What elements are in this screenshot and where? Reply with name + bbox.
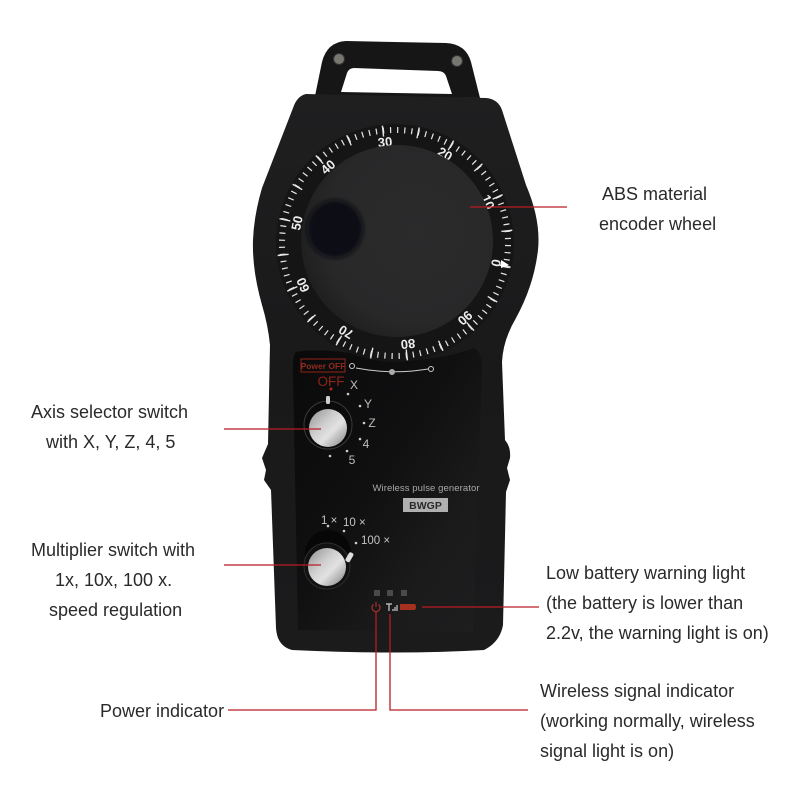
knob base [304,401,352,449]
power slider mark [389,369,395,375]
lower face panel [293,348,482,632]
dial numbers: 30 [377,134,393,150]
dial numbers: 0 [488,258,504,268]
axis letters: X [350,378,358,392]
product description: Wireless pulse generator [372,483,480,494]
dial numbers: 20 [435,144,455,164]
multiplier labels: 1 × [321,515,337,527]
power off box [301,359,345,372]
knob pointer [326,396,330,404]
knob skirt [304,543,350,589]
multiplier scale [321,515,390,547]
handle screw right [452,56,462,66]
indicator lights [372,590,416,612]
axis letters: Z [368,416,376,430]
label: multiplier switch [31,540,195,620]
knob pointer [345,552,354,563]
dial numbers: 50 [288,214,306,232]
multiplier labels [321,515,390,547]
label: axis selector: with X, Y, Z, 4, 5 [45,432,175,452]
label: low battery: Low battery warning light [546,563,745,583]
leader lines [224,207,567,710]
dial numbers: 90 [455,308,475,328]
off dot [330,388,332,390]
encoder dial scale [261,109,529,377]
multiplier labels: 10 × [343,517,366,529]
label: power indicator: Power indicator [100,701,224,721]
multiplier dots [327,525,357,544]
dial face [276,124,514,362]
power icon [372,602,380,612]
carrying handle [315,41,480,98]
multiplier labels: 100 × [361,535,390,547]
label: multiplier switch: 1x, 10x, 100 x. [55,570,172,590]
dial numbers: 80 [400,336,416,352]
dial numbers: 10 [478,192,498,212]
label: multiplier switch: speed regulation [49,600,182,620]
led windows [374,590,407,596]
axis letters: 4 [363,437,370,451]
label: wireless signal: signal light is on) [540,741,674,761]
dial numbers [288,134,504,352]
axis letters: Y [364,397,372,411]
knob silver cap [308,548,346,586]
product name [372,483,480,512]
knob silver cap [309,409,347,447]
signal icon [386,604,397,611]
handheld pulse generator device [253,41,538,652]
power off text: Power OFF [301,361,345,371]
dial numbers: 60 [293,275,313,295]
power off label and slider [301,359,434,375]
power slider scale [356,368,428,372]
label: axis selector: Axis selector switch [31,402,188,422]
model badge [403,498,448,512]
axis selector knob [304,396,352,449]
model text: BWGP [409,500,442,512]
multiplier knob [304,530,354,589]
battery icon [400,604,416,610]
minor tick marks [261,109,529,377]
label: axis selector [31,402,188,452]
dial numbers: 70 [336,322,356,342]
major tick marks [262,110,528,376]
axis selector scale [318,374,376,467]
label: wireless signal: Wireless signal indicator [540,681,734,701]
label: low battery: 2.2v, the warning light is on) [546,623,769,643]
power slider minus [428,366,434,372]
zero marker [501,260,509,268]
finger recess [307,200,363,258]
wheel disc [301,145,493,337]
label: multiplier switch: Multiplier switch with [31,540,195,560]
label: wireless signal: (working normally, wireless [540,711,755,731]
label: wireless signal [540,681,755,761]
axis dots [329,393,365,457]
label: low battery [546,563,769,643]
device body [253,94,538,652]
knob base [305,530,351,576]
encoder wheel [301,145,493,337]
label: low battery: (the battery is lower than [546,593,743,613]
off label: OFF [318,374,344,389]
handle screw left [334,54,344,64]
label: encoder wheel: encoder wheel [599,214,716,234]
label: encoder wheel: ABS material [602,184,707,204]
power slider plus [350,364,354,368]
axis letters: 5 [349,453,356,467]
label: encoder wheel [599,184,716,234]
dial numbers: 40 [318,157,338,177]
axis letters [349,378,376,467]
